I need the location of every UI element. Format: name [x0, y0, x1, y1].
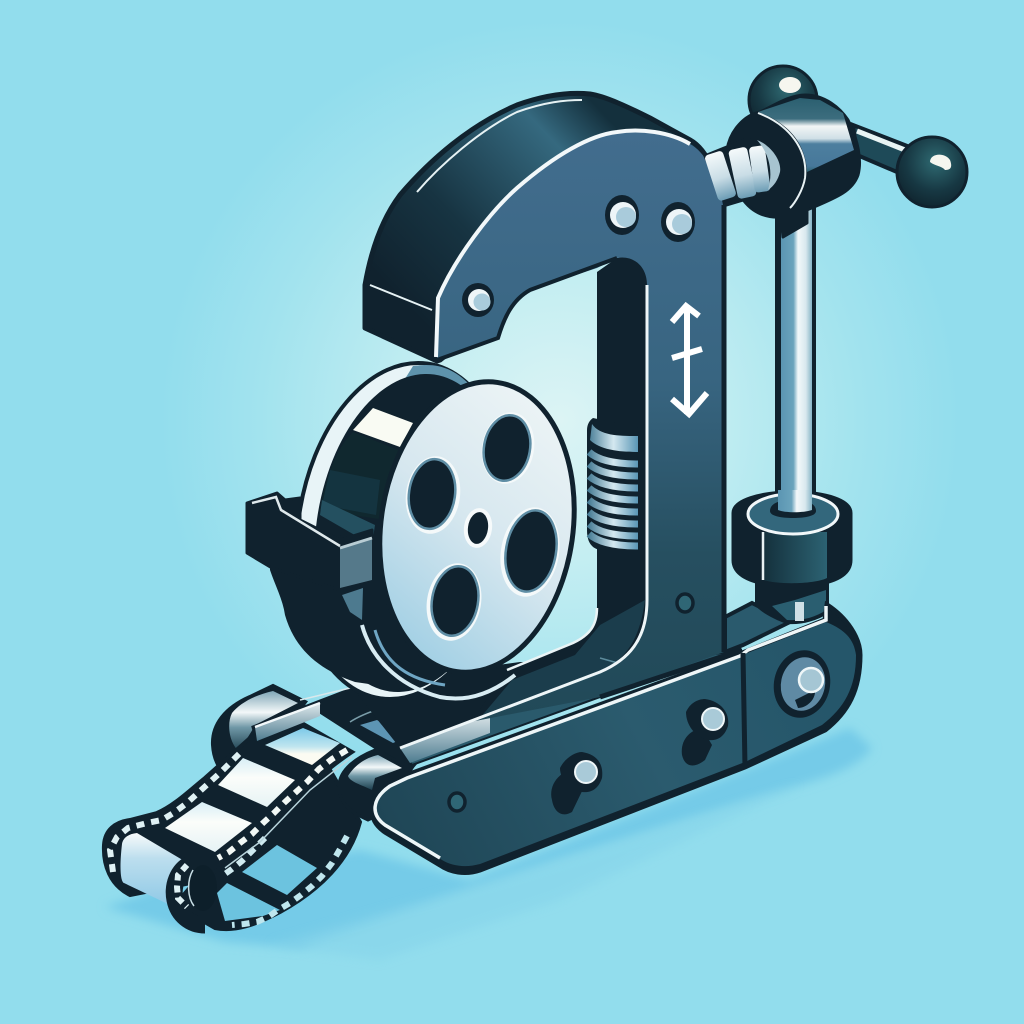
- bolt left with shadow: [551, 752, 602, 814]
- hole left: [401, 453, 465, 537]
- frame two: [218, 758, 295, 807]
- bolt right with shadow: [682, 699, 728, 765]
- foot grey underside: [400, 713, 490, 763]
- pole nut: [733, 490, 851, 624]
- hole top: [476, 408, 540, 488]
- rear roller: [213, 686, 305, 780]
- sprocket holes, left edge: [110, 751, 242, 872]
- base bar: [372, 605, 860, 872]
- rail and deck: [253, 660, 470, 770]
- spring: [587, 418, 640, 550]
- icon: double-headed arrow: [672, 306, 707, 414]
- reel holder body: [270, 535, 410, 690]
- deck under the reel: [350, 662, 625, 765]
- screw thread: [703, 138, 782, 207]
- reel back flange: [276, 349, 532, 713]
- ground shadow: [105, 728, 872, 960]
- film strip: lower loop: [175, 770, 360, 929]
- rivets: [462, 195, 695, 317]
- clamp handle: [703, 66, 967, 237]
- back ball: [749, 66, 817, 134]
- rivet small: [449, 793, 465, 811]
- arch side highlights: [370, 100, 582, 310]
- sprocket holes, right edge: [218, 750, 347, 858]
- clamp frame inner opening: [470, 257, 650, 724]
- frame four on the roll: [121, 833, 186, 906]
- hub: [727, 95, 860, 237]
- clamp frame front face: [437, 130, 724, 722]
- film strip: upper section with frames: [104, 722, 352, 906]
- small hole in frame: [677, 594, 693, 612]
- pole: [775, 205, 816, 505]
- hub hole: [464, 509, 492, 547]
- rear rail behind pole: [725, 603, 790, 652]
- reel front disc: [362, 369, 592, 685]
- clamp arch side: [365, 93, 723, 361]
- front roller: [339, 750, 412, 820]
- frame three: [165, 802, 252, 852]
- front ball: [897, 137, 967, 207]
- reel holder front: [247, 493, 372, 620]
- washer bolt: [768, 645, 836, 723]
- hole bottom: [421, 559, 487, 645]
- film roller end: [174, 864, 217, 925]
- divider: [743, 653, 745, 767]
- frame one: [265, 728, 340, 765]
- face outlines: [400, 130, 742, 748]
- hole right: [494, 503, 566, 601]
- lever: [853, 125, 910, 172]
- flange lower rim: [362, 625, 515, 699]
- clamp foot: [400, 650, 742, 765]
